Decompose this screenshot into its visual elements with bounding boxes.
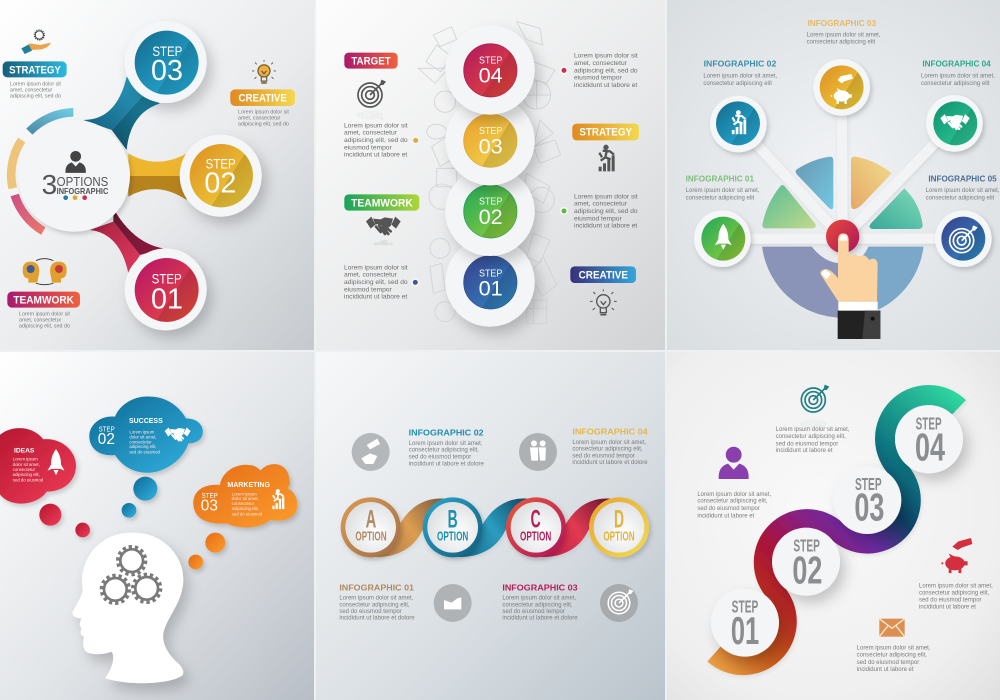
text: piggy bank description: sed do eiusmod tempor [919, 598, 982, 604]
step 03 disc: 03 [479, 133, 503, 158]
text: creative description: adipiscing elit, sed do [238, 122, 289, 128]
icon: envelope [879, 619, 905, 637]
step 03 badge: STEP [152, 43, 182, 59]
text: left block one: amet, consectetur [344, 130, 398, 137]
central hub circle: INFOGRAPHIC [57, 186, 108, 196]
step 02 disc [445, 167, 535, 256]
text: target description: consectetur adipiscing elit, [776, 434, 846, 440]
heading and text: infographic 02: incididunt ut labore et dolore [409, 461, 485, 467]
cloud: marketing: consectetur [232, 501, 255, 506]
text: target description: sed do eiusmod tempor [776, 441, 838, 447]
text: target description: incididunt ut labore et [776, 448, 833, 454]
text: piggy bank description: incididunt ut labore et [919, 605, 976, 611]
heading and text: infographic 02: INFOGRAPHIC 02 [704, 59, 777, 69]
heading and text: infographic 03: Lorem ipsum dolor sit amet, [807, 33, 881, 39]
step 04 disc: STEP [479, 55, 502, 66]
step 04 disc [895, 405, 963, 473]
cloud: marketing: 03 [201, 498, 218, 515]
step 02 disc: STEP [793, 536, 820, 556]
chart: colored semi-circular sectors [762, 157, 923, 318]
serpentine ribbon [714, 395, 959, 665]
heading and text: infographic 03: Lorem ipsum dolor sit amet, [502, 596, 576, 602]
text: left block one: incididunt ut labore et [344, 152, 407, 159]
cloud: marketing: dolor sit amet, [232, 496, 259, 501]
text: piggy bank description: consectetur adipiscing elit, [919, 591, 990, 597]
icon: pointing hand with cuff [820, 233, 880, 339]
head silhouette with gears [72, 533, 183, 683]
step 04 disc: STEP [916, 413, 942, 433]
node: infographic 01 [694, 210, 751, 267]
heading and text: infographic 05: Lorem ipsum dolor sit amet, [926, 188, 1000, 194]
step 01 disc: 01 [731, 610, 759, 653]
heading and text: infographic 02 [703, 59, 778, 87]
cloud: marketing [193, 464, 297, 527]
bullet: red [561, 67, 567, 74]
cloud: success: dolor sit amet, [129, 434, 157, 439]
heading and text: infographic 01 [686, 173, 760, 201]
cloud: success: 02 [98, 431, 115, 448]
label: strategy: STRATEGY [579, 127, 632, 139]
option a: A [366, 507, 376, 534]
step 03 disc: STEP [855, 474, 882, 494]
panel: thought clouds from head [0, 352, 314, 700]
text: envelope description: Lorem ipsum dolor sit amet, [857, 646, 931, 652]
cloud: success: consectetur [129, 439, 152, 444]
bullet: green [561, 208, 567, 214]
text: person description: Lorem ipsum dolor sit amet, [697, 492, 771, 498]
icon: target [801, 385, 829, 429]
heading and text: infographic 04: consectetur adipiscing elit [921, 81, 990, 87]
heading and text: infographic 03: consectetur adipiscing elit [807, 39, 876, 45]
text: creative description: amet, consectetur [238, 116, 281, 122]
cloud: marketing: adipiscing elit, [232, 506, 259, 511]
step 01 badge: STEP [152, 270, 182, 286]
label: creative [570, 266, 636, 283]
step 02 disc: 02 [479, 204, 503, 229]
label: strategy: STRATEGY [9, 64, 61, 76]
label: teamwork: TEAMWORK [351, 198, 413, 210]
cloud: ideas: dolor sit amet, [13, 462, 40, 467]
step 02 disc: STEP [479, 197, 502, 208]
step 01 disc: 01 [479, 275, 503, 300]
heading and text: infographic 03: INFOGRAPHIC 03 [502, 583, 578, 593]
cloud: success: sed do eiusmod [129, 449, 160, 454]
text: teamwork description: amet, consectetur [19, 318, 62, 324]
text: right block one: incididunt ut labore et [574, 82, 637, 89]
icon: two heads exchanging ideas [23, 259, 67, 285]
heading and text: infographic 01: incididunt ut labore et dolore [339, 616, 415, 622]
ribbon connectors [357, 499, 610, 557]
panel: radial button diagram with hand [667, 0, 1000, 350]
option d: D [614, 507, 624, 534]
thought bubbles [39, 477, 225, 569]
option a: OPTION [355, 529, 387, 544]
text: envelope description: sed do eiusmod tempor [857, 660, 919, 666]
node: infographic 02 [710, 96, 767, 152]
panel: four step vertical chain [316, 0, 665, 350]
cloud: marketing: sed do eiusmod [232, 512, 263, 517]
step 04 disc: 04 [479, 63, 503, 88]
heading and text: infographic 01 [339, 583, 415, 622]
option a [341, 497, 401, 557]
step 04 disc [445, 25, 535, 115]
text: left block one: eiusmod tempor [344, 144, 393, 151]
heading and text: infographic 04: consectetur adipiscing elit, [572, 447, 643, 453]
label: target [344, 53, 398, 69]
heading and text: infographic 04 [572, 426, 648, 466]
heading and text: infographic 03: sed do eiusmod tempor [502, 609, 565, 615]
cloud: marketing: Lorem ipsum [232, 491, 257, 496]
step 01 badge [125, 248, 207, 330]
cloud: ideas [0, 428, 76, 504]
central hub circle: 3 [42, 169, 57, 200]
step 01 disc [445, 237, 535, 327]
text: envelope description: consectetur adipiscing elit, [857, 653, 927, 659]
bullet: amber [412, 137, 419, 144]
heading and text: infographic 01: consectetur adipiscing elit, [339, 602, 410, 608]
heading and text: infographic 02: Lorem ipsum dolor sit amet, [409, 441, 483, 447]
step 02 disc: 02 [792, 549, 822, 592]
text: left block two: Lorem ipsum dolor sit [344, 264, 408, 271]
text: person description: incididunt ut labore et [697, 513, 755, 519]
icon: business person [719, 447, 749, 479]
cloud: success [89, 396, 203, 473]
text: left block two: adipiscing elit, sed do [344, 279, 408, 286]
step 02 badge: 02 [204, 168, 236, 200]
cloud: success: Lorem ipsum [129, 429, 154, 434]
text: envelope description: incididunt ut labore et [857, 667, 914, 673]
cloud: ideas: consectetur [13, 467, 36, 472]
step 01 badge: 01 [151, 283, 183, 315]
text: teamwork description: adipiscing elit, sed do [19, 324, 70, 330]
bullet: blue [412, 279, 419, 286]
icon: hand with gear [21, 30, 51, 54]
icon: light bulb [252, 60, 276, 83]
icon: light bulb outline [590, 289, 617, 315]
text: person description: sed do eiusmod tempor [697, 506, 760, 512]
text: right block one: amet, consectetur [574, 60, 628, 67]
cloud: ideas: IDEAS [14, 447, 35, 454]
heading and text: infographic 05: INFOGRAPHIC 05 [928, 173, 997, 183]
red center button [826, 220, 859, 253]
panel: three step radial diagram [0, 0, 314, 350]
step 03 disc: 03 [854, 487, 884, 530]
icon disc: target [600, 584, 638, 622]
option d: OPTION [603, 529, 635, 544]
heading and text: infographic 01: sed do eiusmod tempor [339, 609, 402, 615]
step 03 disc: STEP [479, 126, 502, 137]
step 01 disc: STEP [732, 597, 758, 617]
heading and text: infographic 03: INFOGRAPHIC 03 [808, 18, 876, 28]
text: strategy description: amet, consectetur [10, 88, 53, 94]
text: teamwork description: Lorem ipsum dolor sit [19, 312, 70, 318]
cloud: ideas: Lorem ipsum [13, 457, 38, 462]
cloud: ideas: adipiscing elit, [13, 472, 40, 477]
text: target description: Lorem ipsum dolor sit amet, [776, 427, 850, 433]
text: left block one: adipiscing elit, sed do [344, 137, 408, 144]
option b: OPTION [437, 529, 468, 544]
label: creative: CREATIVE [238, 93, 287, 105]
heading and text: infographic 04: incididunt ut labore et dolore [572, 460, 648, 466]
text: right block two: amet, consectetur [574, 201, 628, 208]
step 02 badge [180, 135, 262, 217]
heading and text: infographic 04: Lorem ipsum dolor sit amet, [921, 74, 995, 80]
text: strategy description: adipiscing elit, sed do [10, 94, 61, 100]
heading and text: infographic 01: consectetur adipiscing elit [686, 195, 755, 201]
text: left block two: eiusmod tempor [344, 286, 393, 293]
heading and text: infographic 02: INFOGRAPHIC 02 [409, 427, 484, 437]
heading and text: infographic 02: sed do eiusmod tempor [409, 454, 471, 460]
icon: piggy bank and coin hand [941, 538, 972, 573]
cloud: success: STEP [99, 424, 115, 433]
option d [589, 497, 649, 557]
text: strategy description: Lorem ipsum dolor sit [10, 82, 61, 88]
text: right block one: Lorem ipsum dolor sit [574, 53, 638, 60]
heading and text: infographic 02: consectetur adipiscing elit, [409, 448, 479, 454]
node: infographic 04 [926, 95, 983, 152]
label: creative: CREATIVE [579, 270, 628, 282]
panel: serpentine four step ribbon [667, 352, 1000, 700]
option b: B [448, 507, 458, 534]
step 03 badge: 03 [151, 55, 183, 87]
heading and text: infographic 02 [409, 427, 485, 467]
heading and text: infographic 01: Lorem ipsum dolor sit amet, [686, 188, 760, 194]
label: strategy [572, 124, 639, 140]
label: target: TARGET [351, 55, 391, 67]
label: creative [230, 89, 295, 106]
cloud: marketing: MARKETING [227, 482, 270, 489]
label: teamwork [7, 292, 80, 308]
text: piggy bank description: Lorem ipsum dolor sit amet, [919, 584, 993, 590]
panel: four option twisted ribbon [316, 352, 665, 700]
step 03 disc [445, 96, 535, 185]
text: left block two: incididunt ut labore et [344, 294, 407, 301]
text: right block two: eiusmod tempor [574, 215, 623, 222]
heading and text: infographic 05: consectetur adipiscing elit [926, 195, 995, 201]
icon: target [358, 80, 386, 120]
text: right block two: Lorem ipsum dolor sit [574, 193, 638, 200]
node: infographic 05 [935, 210, 992, 267]
step 01 disc [711, 589, 779, 657]
heading and text: infographic 04: sed do eiusmod tempor [572, 453, 635, 459]
text: right block two: adipiscing elit, sed do [574, 208, 638, 215]
option c: OPTION [520, 529, 551, 544]
icon disc: two people [519, 433, 557, 471]
text: person description: consectetur adipiscing elit, [697, 499, 768, 505]
node: infographic 03 [813, 59, 870, 116]
option c: C [531, 507, 541, 534]
heading and text: infographic 02: consectetur adipiscing elit [703, 81, 772, 87]
text: right block one: eiusmod tempor [574, 75, 623, 82]
heading and text: infographic 04 [921, 59, 995, 87]
cloud: success: SUCCESS [129, 418, 163, 425]
heading and text: infographic 04: Lorem ipsum dolor sit amet, [572, 440, 646, 446]
step 03 disc [833, 466, 901, 534]
heading and text: infographic 03 [502, 583, 578, 622]
heading and text: infographic 03 [807, 18, 881, 45]
heading and text: infographic 01: Lorem ipsum dolor sit amet, [339, 596, 413, 602]
heading and text: infographic 03: consectetur adipiscing elit, [502, 602, 573, 608]
heading and text: infographic 04: INFOGRAPHIC 04 [922, 59, 991, 69]
heading and text: infographic 02: Lorem ipsum dolor sit amet, [703, 74, 777, 80]
label: teamwork [344, 194, 419, 211]
step 03 badge [125, 21, 207, 103]
icon: runner on bars [599, 145, 615, 171]
cloud: success: adipiscing elit, [129, 444, 157, 449]
option c [506, 497, 566, 557]
text: right block one: adipiscing elit, sed do [574, 67, 638, 74]
cloud: ideas: sed do eiusmod [13, 477, 44, 482]
heading and text: infographic 05 [926, 173, 1000, 201]
option b [423, 497, 483, 557]
icon disc: bar chart [434, 584, 472, 622]
text: right block two: incididunt ut labore et [574, 223, 637, 230]
central hub circle [18, 120, 130, 232]
step 02 disc [772, 528, 840, 596]
text: left block two: amet, consectetur [344, 272, 398, 279]
heading and text: infographic 04: INFOGRAPHIC 04 [572, 426, 648, 436]
text: left block one: Lorem ipsum dolor sit [344, 122, 408, 129]
heading and text: infographic 01: INFOGRAPHIC 01 [339, 583, 414, 593]
cloud: marketing: STEP [202, 491, 218, 500]
label: teamwork: TEAMWORK [13, 295, 74, 307]
step 02 badge: STEP [206, 155, 236, 171]
text: creative description: Lorem ipsum dolor sit [238, 110, 289, 116]
label: strategy [3, 61, 67, 77]
step 04 disc: 04 [915, 427, 945, 470]
heading and text: infographic 01: INFOGRAPHIC 01 [686, 173, 754, 183]
icon disc: handshake reach [352, 433, 390, 471]
central hub circle: OPTIONS [57, 174, 108, 189]
icon: handshake [366, 217, 401, 246]
step 01 disc: STEP [479, 268, 502, 279]
heading and text: infographic 03: incididunt ut labore et dolore [502, 616, 578, 622]
